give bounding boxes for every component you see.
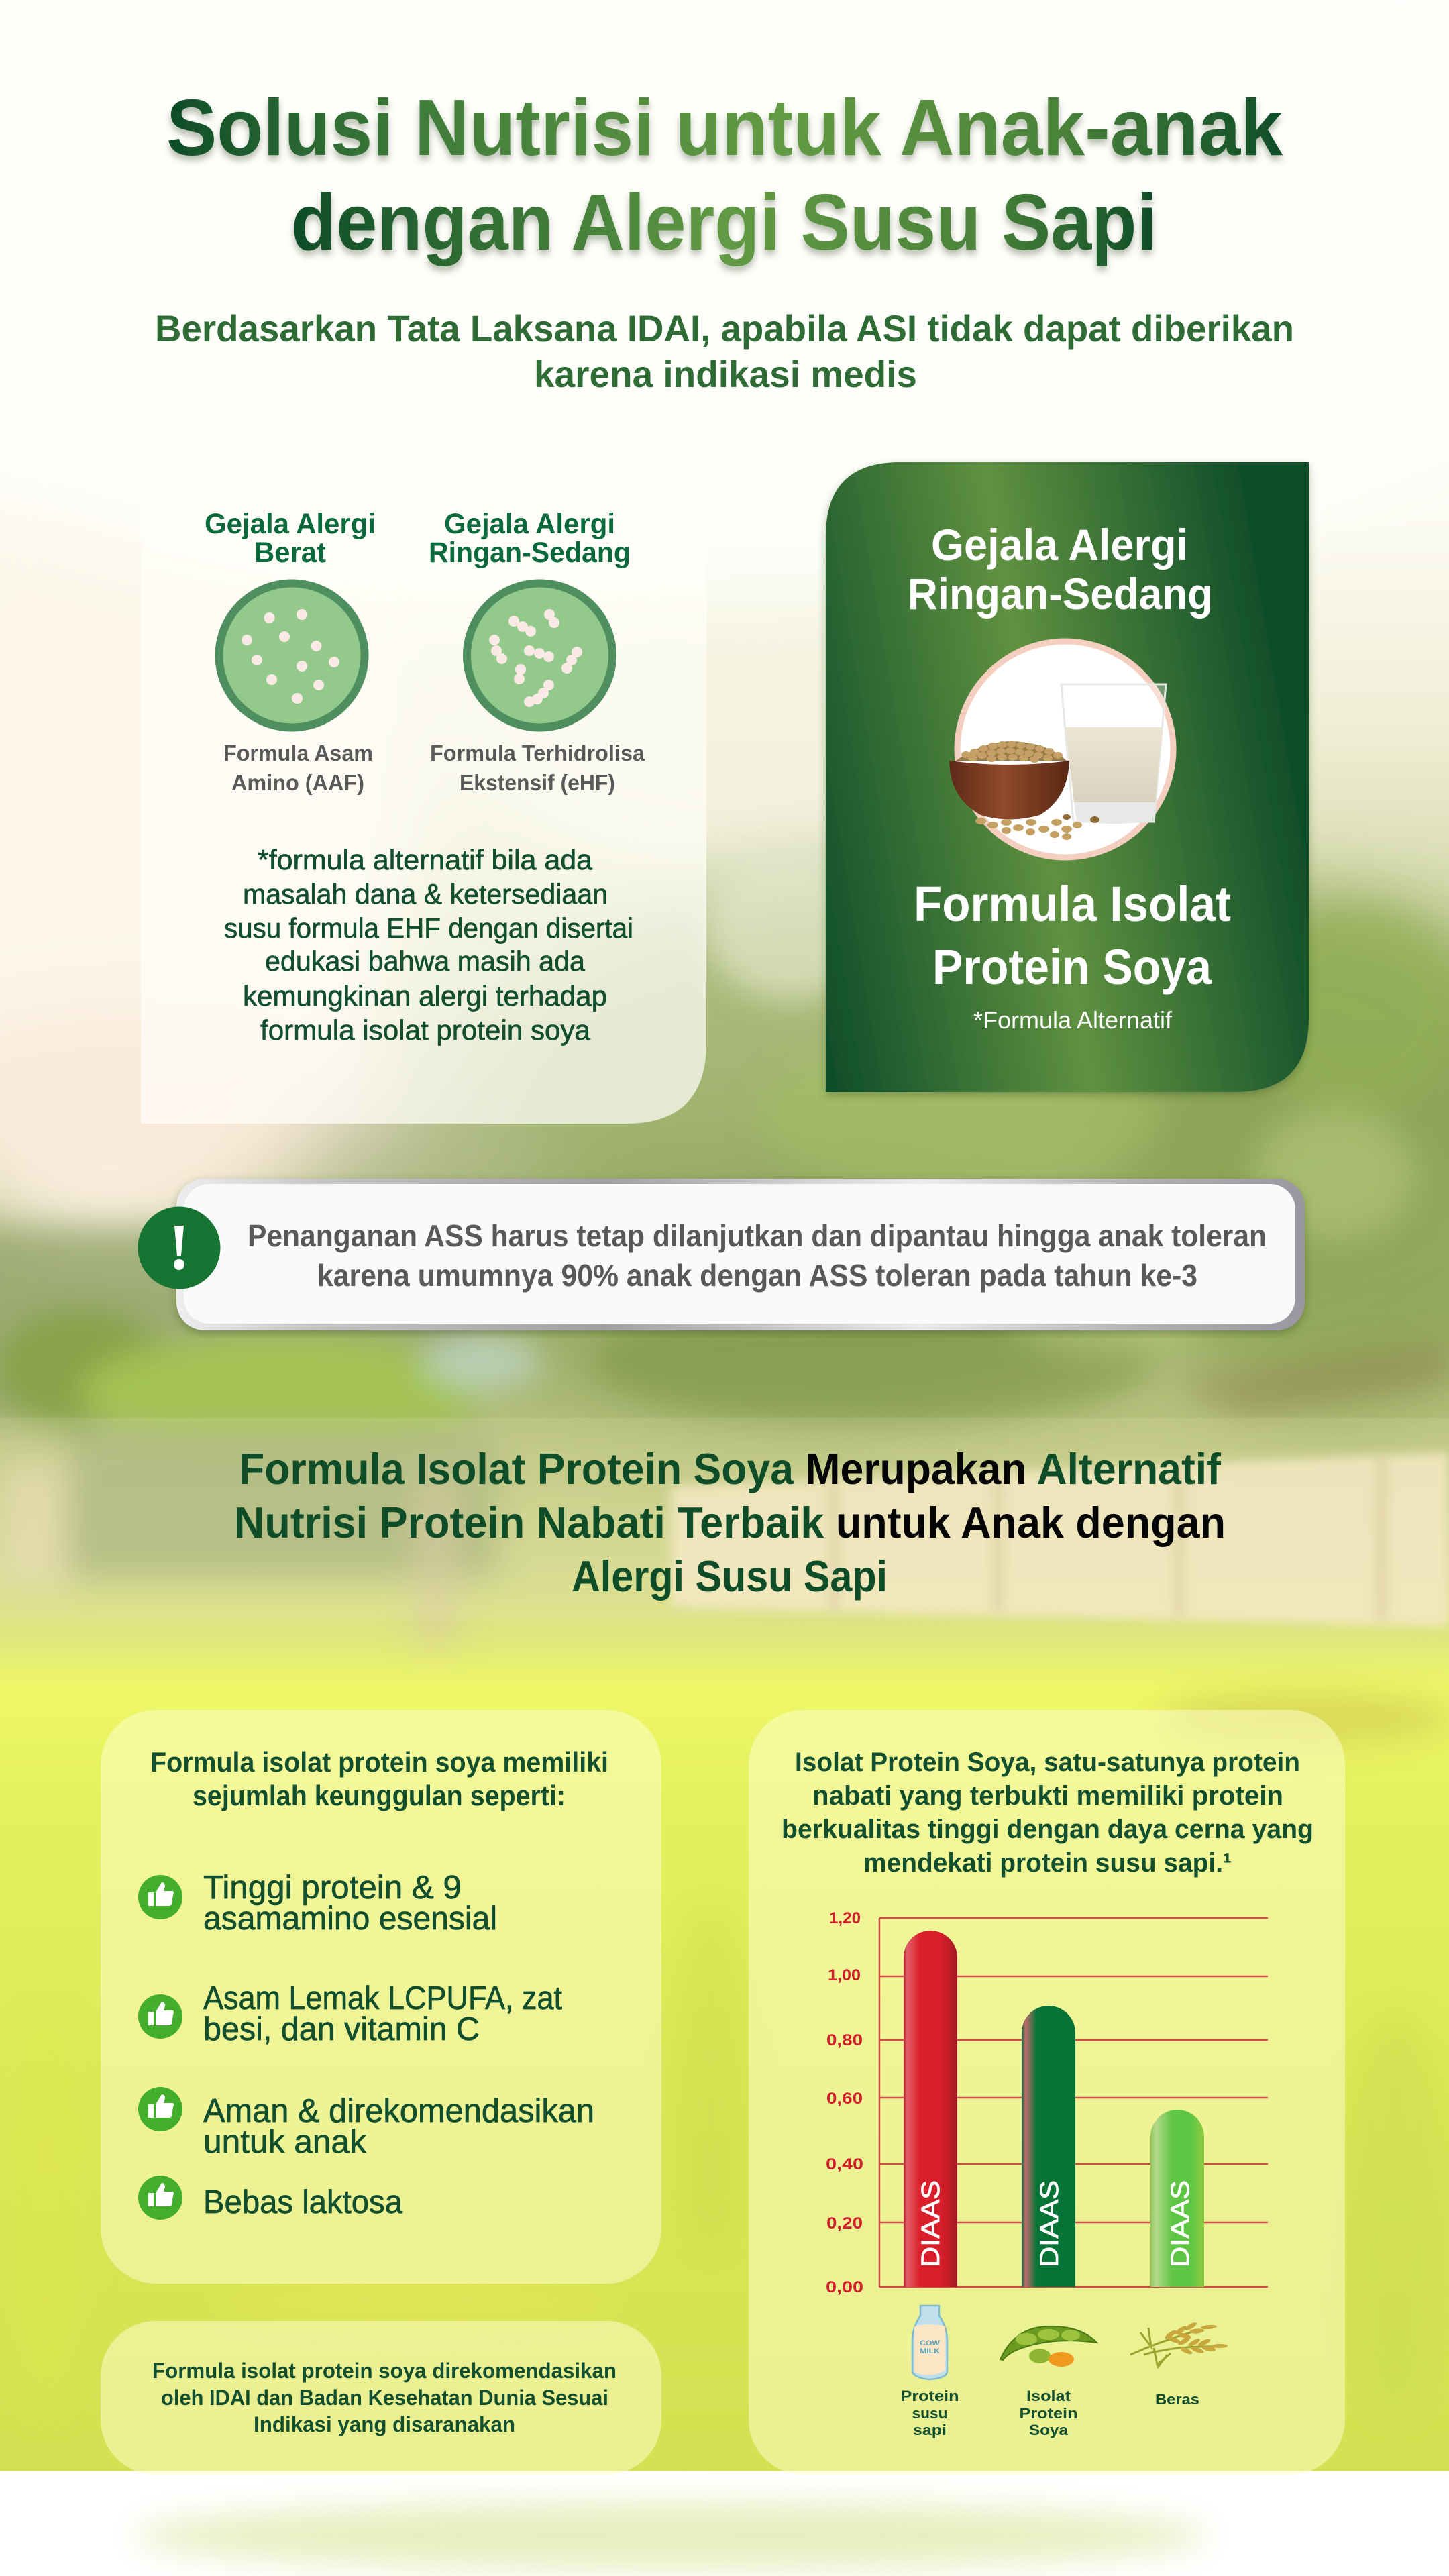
recommendation text: oleh IDAI dan Badan Kesehatan Dunia Sesuai	[161, 2385, 608, 2410]
panel heading: nabati yang terbukti memiliki protein	[812, 1781, 1283, 1811]
label: isolat protein soya: Isolat	[1026, 2387, 1071, 2404]
note: alternative formula: susu formula EHF dengan disertai	[224, 912, 633, 944]
callout: management of cow's milk allergy	[138, 1179, 1305, 1330]
benefit text: lactose free: Bebas laktosa	[203, 2184, 403, 2220]
note: alternative formula: *formula alternatif bila ada	[258, 844, 593, 875]
panel heading: Formula isolat protein soya memiliki	[150, 1746, 608, 1778]
label: protein susu sapi: sapi	[913, 2422, 947, 2438]
label: protein susu sapi: Protein	[900, 2387, 959, 2404]
label: isolat protein soya: Soya	[1029, 2422, 1069, 2438]
axis labels: 0,00	[826, 2278, 863, 2296]
note: alternative formula: edukasi bahwa masih ada	[265, 945, 586, 977]
axis labels: 0,80	[826, 2031, 863, 2049]
heading: gejala alergi ringan-sedang	[429, 508, 631, 569]
section heading: Formula Isolat Protein Soya Merupakan Alternatif	[239, 1444, 1221, 1493]
label: eHF: Ekstensif (eHF)	[460, 770, 615, 795]
panel: advantages	[101, 1710, 661, 2284]
heading: gejala alergi ringan-sedang: Gejala Alergi	[444, 508, 615, 540]
bar chart	[826, 1909, 1268, 2296]
subtitle: Berdasarkan Tata Laksana IDAI, apabila ASI tidak dapat diberikan	[155, 307, 1294, 350]
label: AAF: Amino (AAF)	[231, 770, 364, 795]
benefit text: LCPUFA: Asam Lemak LCPUFA, zat	[203, 1980, 562, 2017]
panel heading: sejumlah keunggulan seperti:	[193, 1780, 566, 1811]
grass mottling	[339, 1682, 1449, 2546]
note: formula alternatif: *Formula Alternatif	[973, 1006, 1173, 1034]
benefit text: safe	[203, 2093, 594, 2160]
benefit text: safe: Aman & direkomendasikan	[203, 2093, 594, 2129]
panel: soy protein isolate formula	[826, 462, 1309, 1092]
note: alternative formula: kemungkinan alergi terhadap	[243, 980, 607, 1012]
heading: gejala alergi ringan-sedang	[908, 520, 1213, 619]
benefit text: LCPUFA	[203, 1980, 562, 2047]
benefit text: protein: Tinggi protein & 9	[203, 1870, 462, 1906]
haze band and fence	[0, 1418, 1449, 1627]
section heading: Nutrisi Protein Nabati Terbaik untuk Anak dengan	[234, 1498, 1226, 1547]
callout text: karena umumnya 90% anak dengan ASS toleran pada tahun ke-3	[317, 1258, 1197, 1293]
label: eHF: Formula Terhidrolisa	[430, 741, 645, 765]
panel heading: berkualitas tinggi dengan daya cerna yang	[782, 1815, 1313, 1844]
benefit text: protein: asamamino esensial	[203, 1900, 497, 1937]
callout text	[248, 1218, 1267, 1293]
icon: cow milk bottle	[912, 2306, 947, 2379]
title	[166, 83, 1283, 267]
benefit text: LCPUFA: besi, dan vitamin C	[203, 2011, 480, 2047]
label: protein susu sapi	[900, 2387, 959, 2438]
heading: gejala alergi ringan-sedang: Ringan-Sedang	[908, 569, 1213, 619]
panel heading: Isolat Protein Soya, satu-satunya protein	[795, 1748, 1300, 1777]
bar: protein susu sapi: DIAAS	[917, 2180, 945, 2267]
panel: DIAAS chart	[749, 1710, 1345, 2475]
bar: isolat protein soya: DIAAS	[1036, 2180, 1064, 2267]
axis labels: 1,00	[828, 1966, 861, 1984]
axis labels: 0,20	[826, 2214, 863, 2233]
icon: thumbs up	[138, 1875, 182, 1919]
label: formula isolat protein soya: Formula Isolat	[914, 876, 1231, 932]
axis labels: 1,20	[829, 1909, 861, 1927]
section heading	[234, 1444, 1226, 1601]
label: eHF	[430, 741, 645, 795]
illustration: soy beans and soy milk	[949, 641, 1173, 857]
recommendation text	[152, 2359, 616, 2436]
bar: beras: DIAAS	[1167, 2180, 1195, 2267]
subtitle: karena indikasi medis	[534, 353, 917, 395]
label: formula isolat protein soya: Protein Soya	[932, 939, 1212, 995]
recommendation text: Formula isolat protein soya direkomendasikan	[152, 2359, 616, 2383]
icon: thumbs up	[138, 2176, 182, 2220]
heading: gejala alergi berat: Gejala Alergi	[205, 508, 376, 540]
axis labels	[826, 1909, 863, 2296]
bar: protein susu sapi	[904, 1931, 957, 2287]
panel heading: mendekati protein susu sapi.¹	[863, 1848, 1232, 1878]
label: formula isolat protein soya	[914, 876, 1231, 995]
note: alternative formula: masalah dana & ketersediaan	[243, 878, 608, 910]
panel heading	[782, 1748, 1313, 1878]
recommendation text: Indikasi yang disaranakan	[254, 2412, 515, 2436]
benefit text: protein	[203, 1870, 497, 1937]
subtitle	[155, 307, 1294, 395]
panel heading	[150, 1746, 608, 1811]
label: isolat protein soya	[1020, 2387, 1077, 2438]
icon: rice stalks	[1130, 2321, 1228, 2368]
icon: free amino acids circle	[219, 584, 365, 727]
title: dengan Alergi Susu Sapi	[291, 178, 1157, 267]
icon: cow milk bottle: MILK	[920, 2347, 940, 2355]
heading: gejala alergi berat: Berat	[254, 537, 326, 569]
title: Solusi Nutrisi untuk Anak-anak	[166, 83, 1283, 172]
axis labels: 0,40	[826, 2155, 863, 2174]
axis labels: 0,60	[826, 2090, 863, 2108]
heading: gejala alergi berat	[205, 508, 376, 569]
icon: thumbs up	[138, 2087, 182, 2131]
note: alternative formula: formula isolat protein soya	[260, 1014, 591, 1046]
label: protein susu sapi: susu	[912, 2405, 947, 2422]
note: alternative formula	[224, 844, 633, 1046]
icon: soybean pod	[1000, 2326, 1097, 2367]
heading: gejala alergi ringan-sedang: Ringan-Sedang	[429, 537, 631, 569]
icon: exclamation mark	[138, 1206, 220, 1289]
icon: cow milk bottle: COW	[920, 2339, 941, 2347]
bar: beras	[1150, 2110, 1204, 2287]
label: AAF	[223, 741, 373, 795]
bar: isolat protein soya	[1022, 2006, 1075, 2287]
label: beras: Beras	[1155, 2391, 1199, 2408]
label: isolat protein soya: Protein	[1020, 2405, 1077, 2422]
heading: gejala alergi ringan-sedang: Gejala Alergi	[931, 520, 1188, 570]
panel: formula options	[141, 456, 706, 1124]
icon: hydrolysed peptide chains circle	[467, 584, 612, 727]
icon: thumbs up	[138, 1994, 182, 2039]
panel: recommendation	[101, 2321, 661, 2475]
benefit text: safe: untuk anak	[203, 2124, 366, 2160]
label: AAF: Formula Asam	[223, 741, 373, 765]
callout text: Penanganan ASS harus tetap dilanjutkan dan dipantau hingga anak toleran	[248, 1218, 1267, 1253]
section heading: Alergi Susu Sapi	[572, 1552, 888, 1601]
